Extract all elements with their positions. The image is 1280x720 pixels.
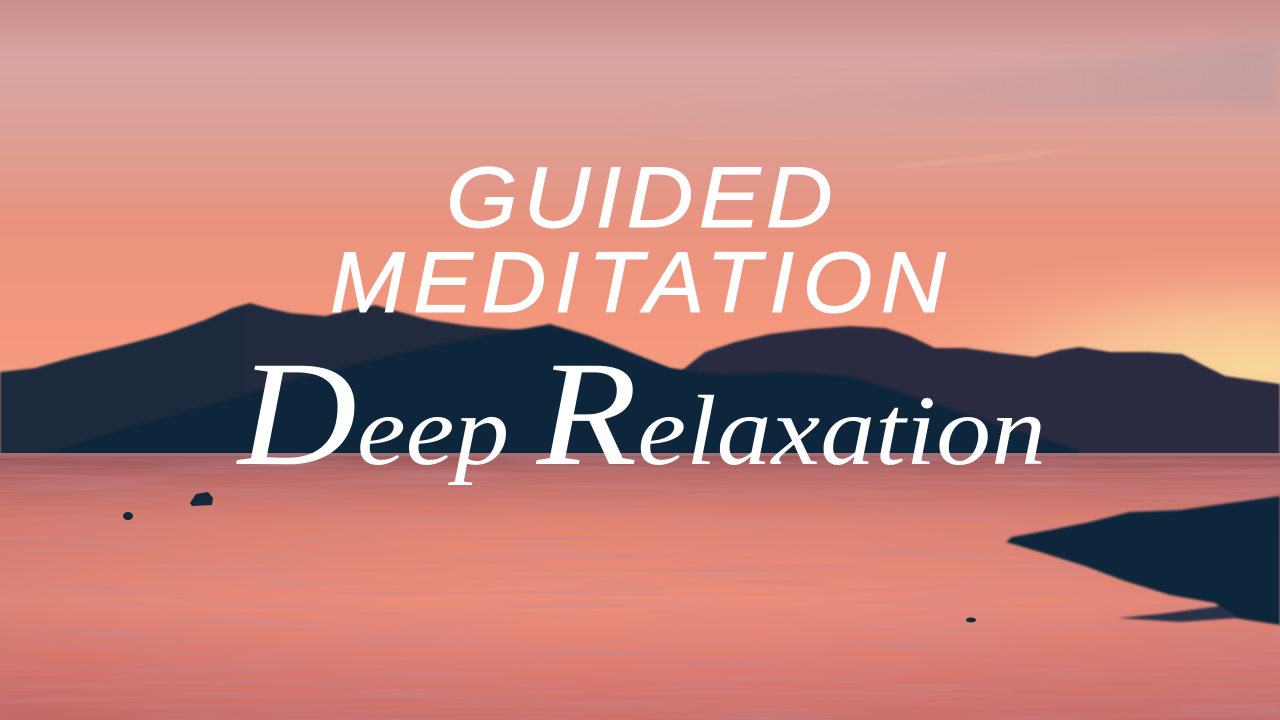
background: sunset sky bbox=[0, 0, 1280, 460]
heading: MEDITATION: MEDITATION bbox=[330, 235, 954, 331]
lake water bbox=[0, 453, 1280, 720]
shoreline headland bbox=[1006, 496, 1280, 625]
near mountain range bbox=[40, 324, 1078, 457]
far mountain range bbox=[0, 303, 1280, 456]
heading: GUIDED: GUIDED bbox=[446, 150, 838, 246]
small rocks in the water bbox=[123, 492, 976, 622]
script title: Deep Relaxation: Deep Relaxation bbox=[236, 331, 1046, 497]
